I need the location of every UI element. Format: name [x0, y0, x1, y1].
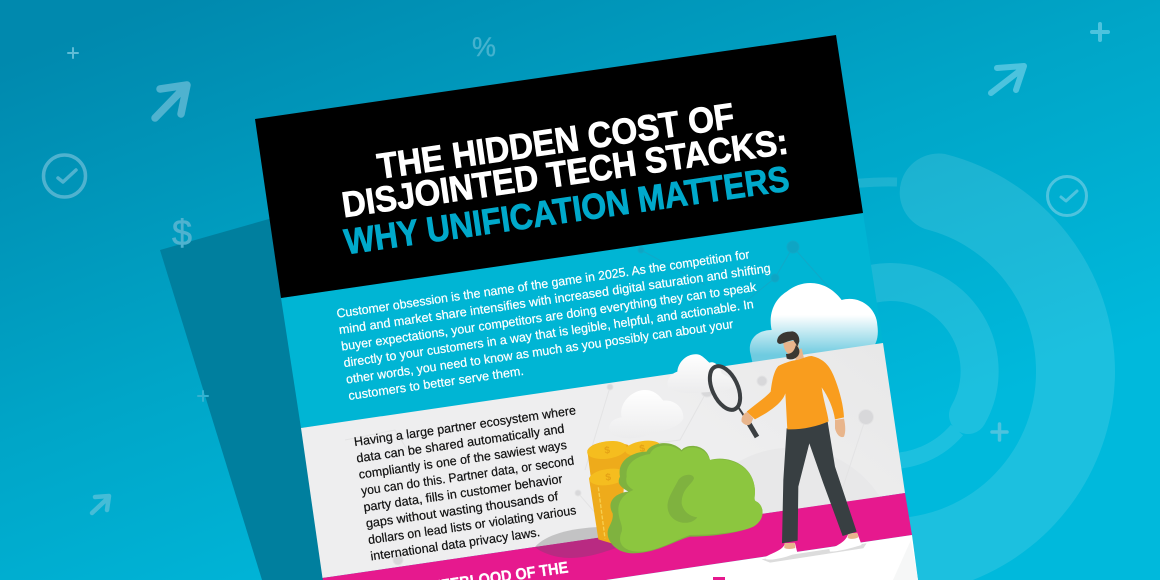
icon: arrow lower left [92, 496, 109, 513]
illustration: coin shadow on pink [535, 536, 625, 558]
neck [794, 348, 804, 362]
gold coin stacks [587, 442, 662, 543]
partner data paragraph [353, 403, 593, 563]
title: WHY UNIFICATION MATTERS [342, 158, 792, 262]
icon: arrow top left [155, 85, 187, 118]
icon: dollar sign: $ [172, 212, 192, 253]
icon: plus right [992, 424, 1007, 440]
trousers [782, 422, 857, 543]
title [332, 88, 796, 262]
partner data paragraph: you can do this. Partner data, or second [360, 454, 575, 498]
bush light foliage [618, 446, 763, 552]
partner data paragraph: international data privacy laws. [370, 525, 541, 563]
icon: plus top left [68, 48, 78, 58]
network decoration on blue [638, 241, 840, 310]
soft circle on gray [690, 448, 880, 524]
text layer: title and paragraphs [313, 88, 839, 563]
partner data paragraph: party data, fills in customer behavior [363, 472, 563, 514]
icon: plus lower left [198, 391, 208, 401]
partner data paragraph: dollars on lead lists or violating various [367, 503, 577, 547]
cloud behind coins [609, 390, 683, 438]
cloud behind magnifier [667, 354, 740, 393]
background concentric rings [830, 153, 1115, 580]
title: DISJOINTED TECH STACKS: [339, 120, 790, 225]
intro paragraph: customers to better serve them. [347, 364, 525, 403]
ground shadow [762, 543, 867, 563]
icon: percent sign: % [472, 32, 496, 62]
magnifying glass [704, 361, 757, 437]
network decoration on gray [345, 376, 874, 565]
sweater [747, 356, 844, 429]
intro paragraph: mind and market share intensifies with increased digital saturation and shifting [338, 261, 772, 337]
left hand [741, 412, 753, 425]
beard [786, 345, 799, 359]
partner data paragraph: gaps without wasting thousands of [365, 489, 559, 531]
illustration: coins and bush [586, 439, 763, 553]
panel: white section [606, 535, 918, 580]
white band arc [893, 540, 918, 580]
bush dark base [608, 443, 763, 553]
icon: plus top right [1092, 24, 1108, 40]
icon: check circle left [44, 155, 86, 197]
intro paragraph: other words, you need to know as much as you possibly can about your [345, 317, 734, 387]
right hand [835, 419, 845, 437]
partner data paragraph: Having a large partner ecosystem where [353, 403, 577, 449]
shoes [766, 543, 797, 560]
illustration: man with magnifying glass [704, 331, 867, 563]
partner data paragraph: data can be shared automatically and [355, 422, 565, 465]
illustration: coins and bush: $ [605, 472, 612, 484]
illustration: coins and bush: $ [604, 445, 611, 457]
intro paragraph: directly to your customers in a way that is legible, helpful, and actionable. In [343, 297, 755, 370]
icon: check circle right [1048, 176, 1086, 216]
illustration: coins and bush: $ [639, 443, 646, 455]
illustration: clouds behind coins and magnifier [609, 354, 740, 438]
bush shadow crescent [668, 475, 697, 523]
panel: intro blue section [281, 213, 883, 428]
panel: title block [255, 35, 863, 298]
panel: pink heading band [322, 493, 912, 580]
illustration: large cloud [750, 283, 878, 367]
intro paragraph [336, 245, 781, 403]
face [783, 340, 799, 354]
background shadow panel [160, 213, 330, 580]
title: THE HIDDEN COST OF [375, 95, 737, 187]
intro paragraph: buyer expectations, your competitors are doing everything they can to speak [340, 280, 758, 354]
pink heading glimpse on white [713, 577, 725, 580]
hair [777, 331, 799, 347]
intro paragraph: Customer obsession is the name of the game in 2025. As the competition for [336, 247, 750, 321]
partner data paragraph: compliantly is one of the sawiest ways [358, 438, 568, 482]
panel: gray partner data section [301, 343, 905, 578]
icon: arrow top right [991, 66, 1024, 93]
illustration: coin shadow [535, 527, 610, 547]
